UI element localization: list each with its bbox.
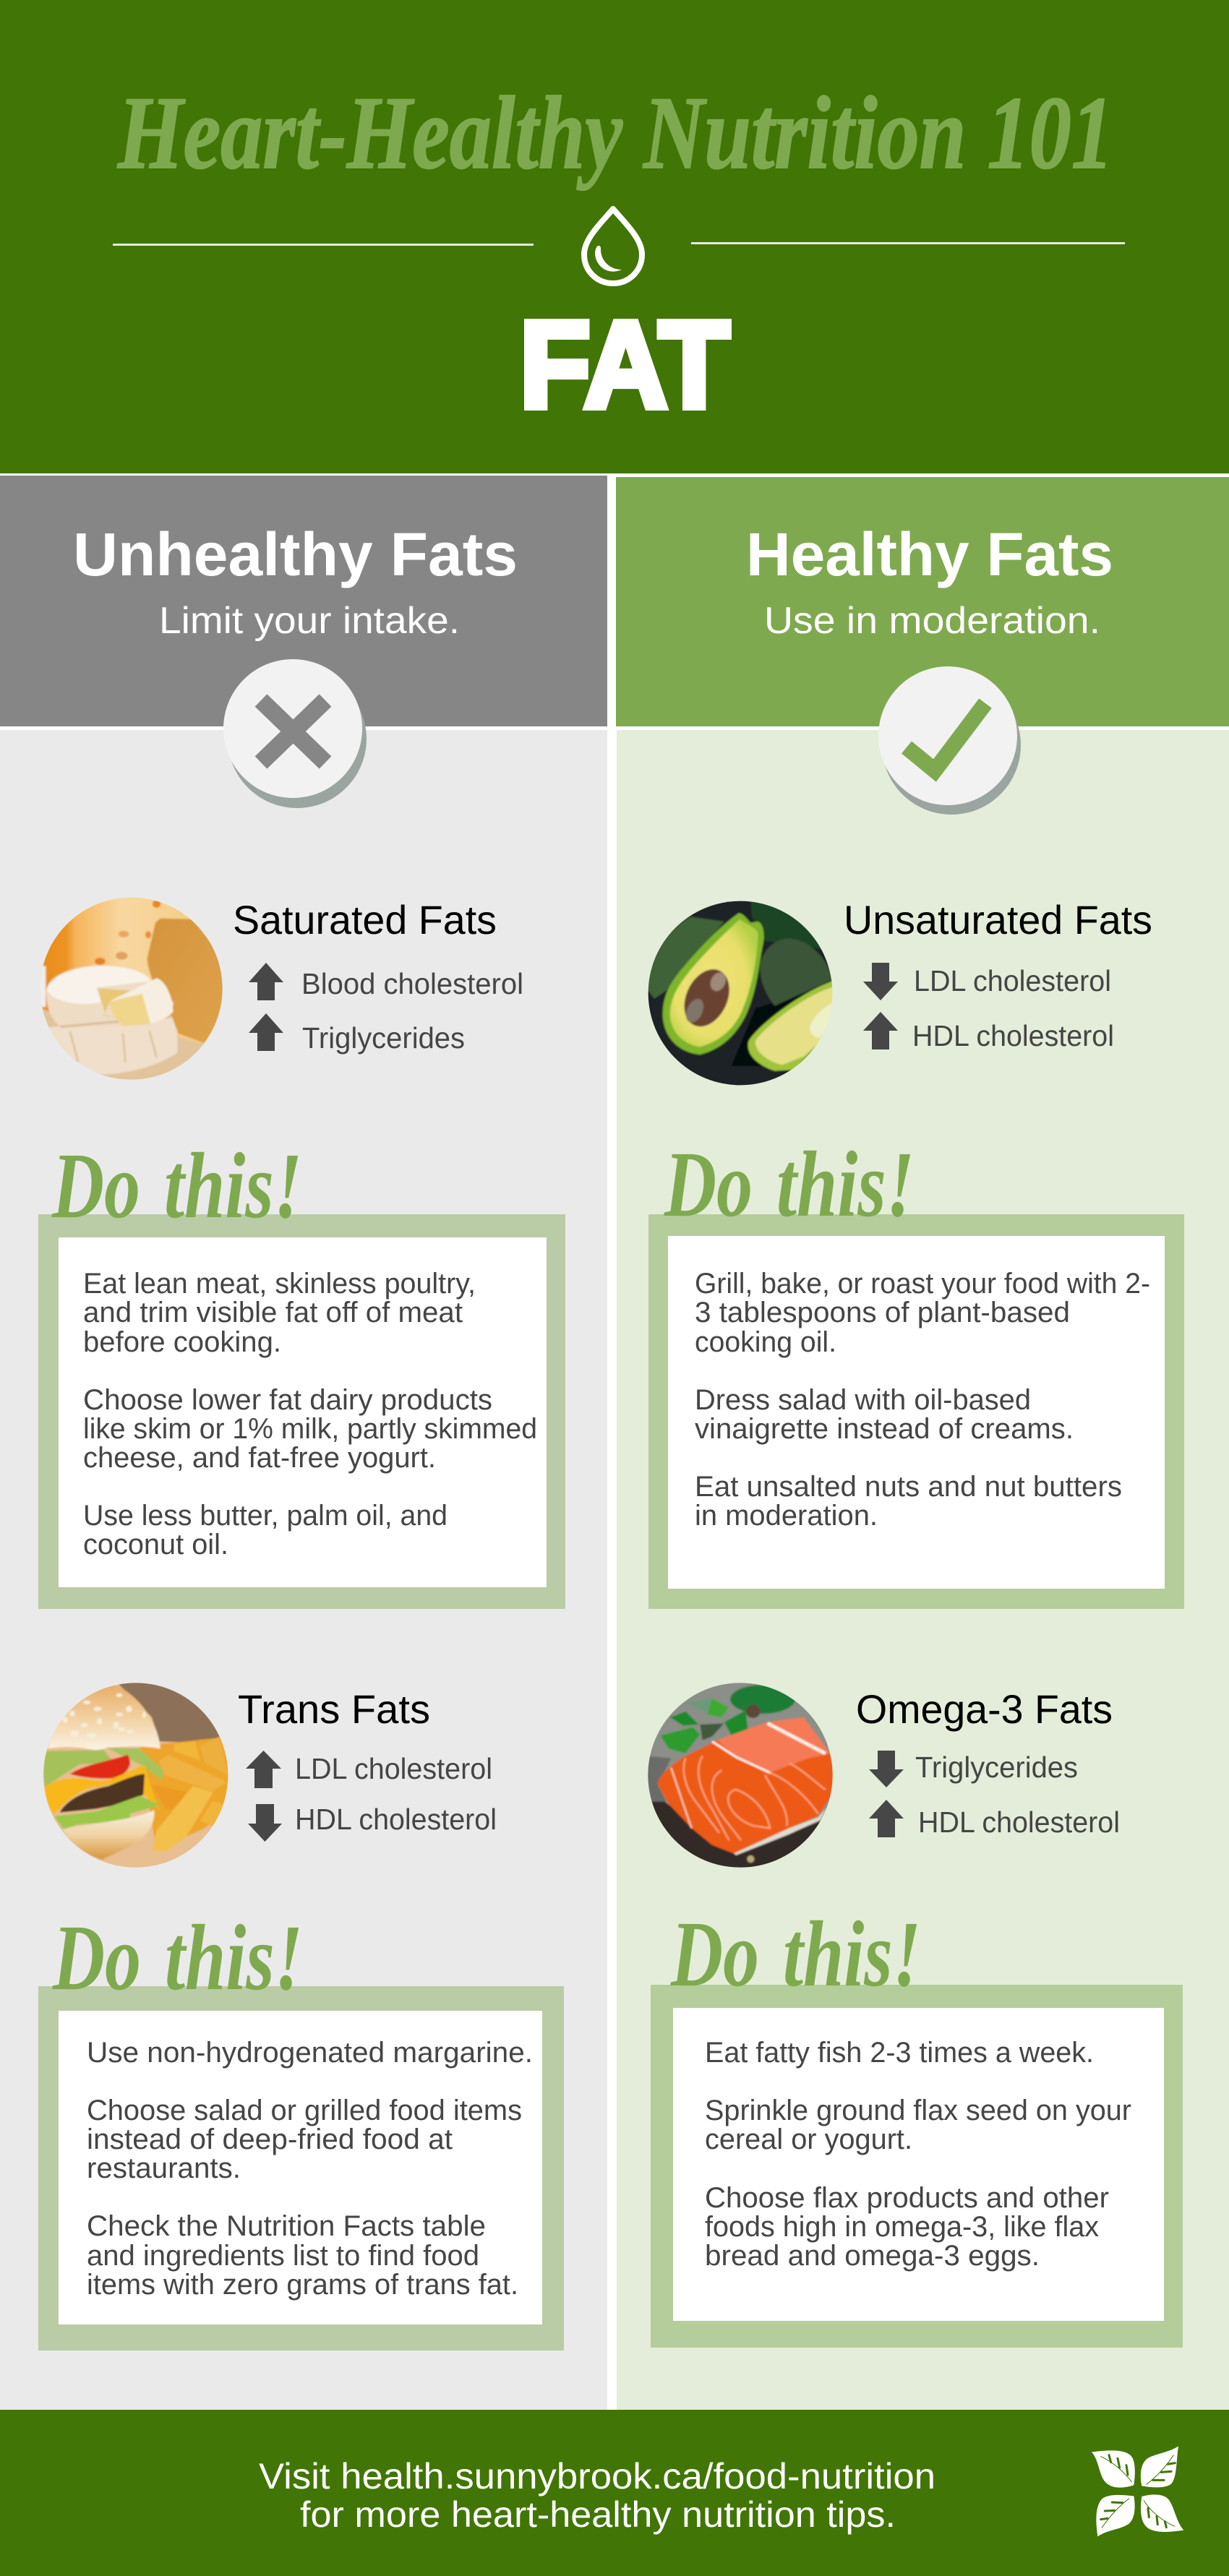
text block: tips: foods high in omega-3, like flax <box>705 2211 1099 2243</box>
text block: tips: Dress salad with oil-based <box>695 1384 1031 1416</box>
heading: do this: this! <box>776 1133 915 1237</box>
heading: do this: this! <box>164 1134 302 1238</box>
text block: tips: cooking oil. <box>695 1326 836 1358</box>
panel: healthy fats column <box>616 477 1229 2410</box>
heading: do this: this! <box>165 1906 303 2010</box>
text block: tips: Use less butter, palm oil, and <box>83 1500 448 1532</box>
food group: unsaturated fats <box>646 897 1152 1088</box>
photo: avocado <box>646 898 835 1088</box>
text block: tips: Eat unsalted nuts and nut butters <box>695 1471 1122 1503</box>
text block: tips: Check the Nutrition Facts table <box>87 2210 486 2242</box>
text block: tips: Eat lean meat, skinless poultry, <box>83 1268 476 1300</box>
heading: omega-3 fats: Omega-3 Fats <box>856 1686 1113 1732</box>
text block: tips: vinaigrette instead of creams. <box>695 1413 1074 1445</box>
label: LDL cholesterol: LDL cholesterol <box>914 964 1111 997</box>
text block: tips: like skim or 1% milk, partly skimmed <box>83 1413 537 1445</box>
text block: tips: Choose lower fat dairy products <box>83 1384 492 1416</box>
heading: FAT: FAT <box>520 296 729 434</box>
icon: arrow down <box>248 1804 282 1842</box>
heading: do this <box>664 1133 915 1237</box>
heading: do this: Do <box>51 1134 140 1238</box>
heading: saturated fats: Saturated Fats <box>233 897 497 943</box>
photo: burger and fries <box>42 1681 230 1869</box>
food group: omega-3 fats <box>646 1681 1120 1869</box>
label: triglycerides: Triglycerides <box>915 1751 1078 1784</box>
label: LDL cholesterol: LDL cholesterol <box>295 1752 492 1785</box>
heading: do this <box>670 1902 921 2006</box>
heading: do this: Do <box>664 1133 753 1237</box>
text block: tips: cheese, and fat-free yogurt. <box>83 1442 436 1474</box>
heading: do this: this! <box>783 1902 921 2006</box>
icon: oil drop <box>584 209 642 283</box>
text block: tips: 3 tablespoons of plant-based <box>695 1297 1070 1328</box>
text block: tips: instead of deep-fried food at <box>87 2124 453 2155</box>
text block: tips: cereal or yogurt. <box>705 2124 912 2155</box>
callout: trans fats tips <box>38 1906 564 2350</box>
text block: tips <box>705 2037 1131 2272</box>
heading: unhealthy fats: Unhealthy Fats <box>73 520 518 588</box>
text block: tips: Eat fatty fish 2-3 times a week. <box>705 2037 1094 2069</box>
text block: tips: coconut oil. <box>83 1529 228 1560</box>
callout: saturated fats tips <box>38 1134 565 1609</box>
heading: healthy fats: Healthy Fats <box>746 520 1113 588</box>
label: HDL cholesterol: HDL cholesterol <box>918 1806 1120 1839</box>
subheading: limit your intake: Limit your intake. <box>159 600 460 642</box>
panel: header <box>0 0 1229 473</box>
heading: do this <box>51 1134 302 1238</box>
icon: arrow up <box>246 1751 281 1788</box>
text block: tips <box>695 1268 1150 1532</box>
icon: check badge <box>878 666 1021 815</box>
label: HDL cholesterol: HDL cholesterol <box>295 1803 497 1836</box>
subheading: use in moderation: Use in moderation. <box>764 600 1100 642</box>
heading: unsaturated fats: Unsaturated Fats <box>844 897 1152 943</box>
text block: tips <box>87 2037 533 2301</box>
text: footer message: Visit health.sunnybrook.ca/food-nutrition <box>259 2456 935 2496</box>
food group: saturated fats <box>38 895 523 1084</box>
text block: tips: and trim visible fat off of meat <box>83 1297 463 1328</box>
heading: do this <box>52 1906 303 2010</box>
icon: arrow down <box>863 963 898 1000</box>
label: HDL cholesterol: HDL cholesterol <box>912 1019 1114 1052</box>
text: footer message: for more heart-healthy nutrition tips. <box>300 2494 896 2535</box>
food group: trans fats <box>42 1681 497 1869</box>
text block: tips: and ingredients list to find food <box>87 2240 479 2272</box>
text block: tips: Sprinkle ground flax seed on your <box>705 2095 1131 2126</box>
text block: tips: before cooking. <box>83 1326 281 1358</box>
callout: omega-3 tips <box>651 1902 1183 2348</box>
icon: arrow down <box>869 1751 904 1787</box>
photo: cheese <box>38 895 226 1084</box>
text block: tips: Grill, bake, or roast your food with 2- <box>695 1268 1150 1300</box>
icon: arrow up <box>863 1012 898 1049</box>
text block: tips: items with zero grams of trans fat. <box>87 2269 518 2301</box>
text block: tips: Choose salad or grilled food items <box>87 2095 522 2126</box>
panel: unhealthy fats column <box>0 476 607 2410</box>
text block: tips: restaurants. <box>87 2152 241 2184</box>
callout: unsaturated fats tips <box>648 1133 1184 1609</box>
heading: do this: Do <box>670 1902 759 2006</box>
icon: arrow up <box>249 963 283 1000</box>
text block: tips: Choose flax products and other <box>705 2182 1109 2214</box>
icon: arrow up <box>249 1013 283 1051</box>
icon: four leaves logo <box>1092 2446 1183 2536</box>
heading: trans fats: Trans Fats <box>238 1686 430 1732</box>
icon: cross badge <box>223 659 367 808</box>
heading: do this: Do <box>52 1906 141 2010</box>
text block: tips: in moderation. <box>695 1500 878 1532</box>
label: blood cholesterol: Blood cholesterol <box>301 967 523 1000</box>
panel: footer <box>0 2410 1229 2576</box>
text: footer message <box>259 2456 935 2535</box>
label: triglycerides: Triglycerides <box>302 1021 465 1055</box>
text block: tips <box>83 1268 537 1560</box>
icon: arrow up <box>869 1800 904 1837</box>
text block: tips: bread and omega-3 eggs. <box>705 2240 1040 2272</box>
text block: tips: Use non-hydrogenated margarine. <box>87 2037 533 2069</box>
photo: salmon <box>646 1681 835 1869</box>
